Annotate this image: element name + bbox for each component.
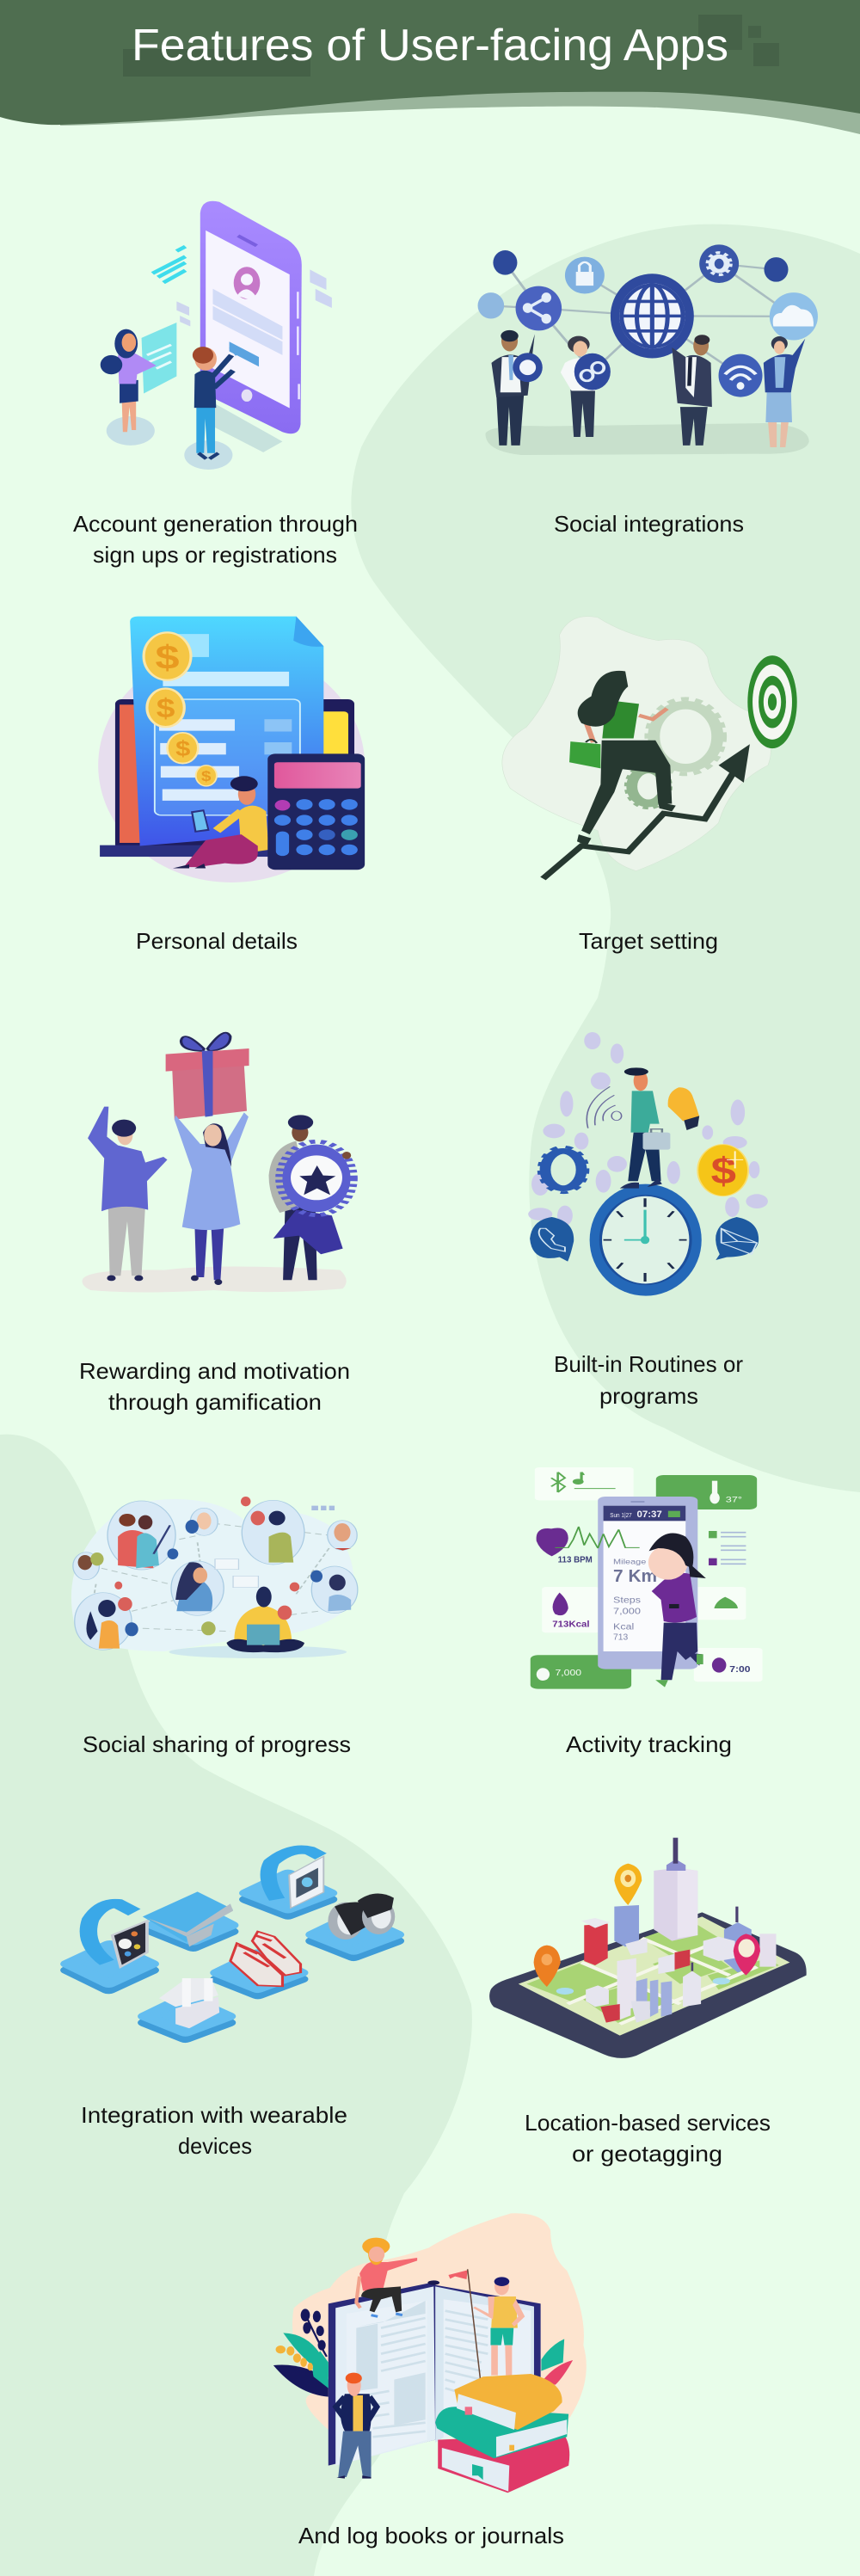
illustration: document, coins, calculator: $ — [175, 738, 190, 760]
caption — [79, 1358, 350, 1415]
caption — [73, 511, 358, 568]
caption: Activity tracking — [566, 1731, 732, 1757]
illustration: phone fitness stats and runner: 113 BPM — [558, 1555, 593, 1565]
illustration: phone fitness stats and runner: 7:00 — [729, 1664, 751, 1675]
panel: social integrations — [478, 244, 818, 537]
illustration: woman climbing arrow to target — [502, 617, 797, 878]
illustration: man on clock with icons: $ — [711, 1151, 736, 1192]
caption: Location-based services — [525, 2110, 771, 2136]
illustration: phone fitness stats and runner: 7 Km — [613, 1566, 657, 1586]
illustration: social network of people — [71, 1497, 358, 1658]
caption: Target setting — [579, 928, 718, 954]
panel: activity tracking — [531, 1467, 763, 1757]
caption: through gamification — [108, 1389, 322, 1415]
illustration: wearables on blue platforms — [69, 1850, 396, 2038]
panel: log books — [273, 2213, 587, 2548]
illustration: open book, people and stacked books — [273, 2213, 587, 2493]
header banner — [0, 0, 860, 134]
illustration: phone fitness stats and runner: Mileage — [613, 1557, 646, 1565]
panel: wearable devices — [69, 1850, 396, 2159]
caption: or geotagging — [572, 2141, 722, 2167]
illustration: phone fitness stats and runner: 713Kcal — [552, 1620, 590, 1629]
illustration: phone fitness stats and runner: 7,000 — [555, 1668, 581, 1678]
caption: Social integrations — [554, 511, 744, 537]
illustration: tablet with isometric city — [489, 1838, 807, 2058]
caption: programs — [599, 1383, 698, 1409]
panel: target setting — [502, 617, 797, 954]
caption: Social sharing of progress — [83, 1731, 351, 1757]
illustration: document, coins, calculator: $ — [201, 769, 212, 784]
illustration: phone fitness stats and runner: 37° — [726, 1496, 742, 1504]
illustration: phone fitness stats and runner: 7,000 — [613, 1607, 641, 1616]
caption: Integration with wearable — [81, 2102, 347, 2128]
panel: location-based services — [489, 1838, 807, 2167]
caption: Personal details — [136, 928, 298, 954]
illustration: document, coins, calculator: $ — [157, 693, 175, 723]
illustration: phone fitness stats and runner: 07:37 — [636, 1509, 662, 1520]
illustration: phone fitness stats and runner: Steps — [613, 1595, 641, 1605]
illustration: people with gift and badge — [83, 1033, 353, 1292]
illustration: document, coins, calculator: $ — [155, 638, 180, 676]
illustration: phone fitness stats and runner: Kcal — [613, 1622, 634, 1632]
illustration: phone fitness stats and runner: 713 — [613, 1632, 628, 1642]
caption — [81, 2102, 347, 2159]
background blob: right — [351, 224, 860, 1492]
background blob: left — [0, 1435, 472, 2576]
illustration: man on clock with icons — [528, 1032, 768, 1296]
caption: Built-in Routines or — [554, 1351, 743, 1377]
caption: devices — [178, 2133, 252, 2159]
illustration: people and network — [478, 244, 818, 455]
caption — [525, 2110, 771, 2167]
panel: social sharing — [71, 1497, 358, 1757]
illustration: phone fitness stats and runner: Sun 1|27 — [610, 1512, 632, 1519]
panel: rewarding and motivation — [79, 1033, 353, 1415]
panel: account generation — [73, 201, 358, 568]
illustration: phone sign up — [101, 201, 332, 470]
panel: built-in routines — [528, 1032, 768, 1409]
title: Features of User-facing Apps — [132, 21, 728, 71]
caption: sign ups or registrations — [93, 542, 337, 568]
caption — [554, 1351, 743, 1409]
caption: Account generation through — [73, 511, 358, 537]
illustration: document, coins, calculator — [98, 617, 365, 882]
panel: personal details — [98, 617, 365, 954]
illustration: phone fitness stats and runner — [531, 1467, 763, 1689]
caption: Rewarding and motivation — [79, 1358, 350, 1384]
caption: And log books or journals — [298, 2523, 564, 2548]
